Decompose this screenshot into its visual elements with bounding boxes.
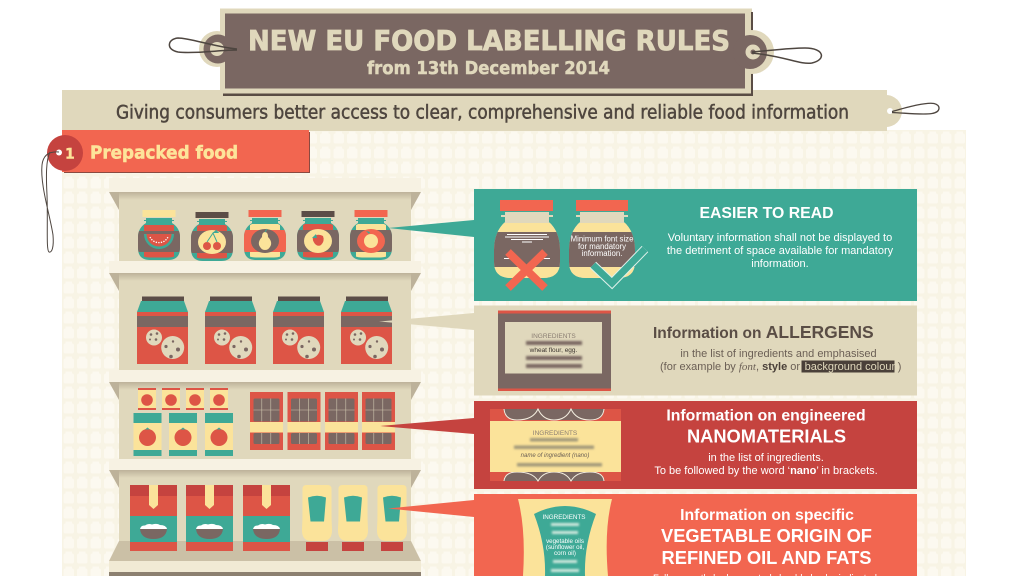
oil bottle label: INGREDIENTS <box>542 514 586 521</box>
example text: (for example by font, style or background colour ) <box>660 361 901 373</box>
right string <box>752 48 821 63</box>
heading: Information on ALLERGENS <box>653 322 874 342</box>
ingredient label with emphasis: INGREDIENTS <box>531 333 576 340</box>
body text: the detriment of space available for mandatory <box>667 245 894 257</box>
title date: from 13th December 2014 <box>367 58 610 79</box>
ingredient label with emphasis <box>498 310 611 391</box>
product: cookie cartons <box>137 296 392 364</box>
ingredient label nano <box>490 409 621 481</box>
heading: Information on engineered <box>666 408 866 424</box>
product: strawberry jam jar <box>297 211 339 260</box>
section number: 1 <box>65 146 75 162</box>
callout pointer: jar <box>388 220 474 237</box>
title text: NEW EU FOOD LABELLING RULES <box>248 24 730 57</box>
tag string <box>42 152 59 252</box>
supermarket shelves <box>109 178 421 576</box>
oil bottle label: (sunflower oil, <box>546 544 584 551</box>
left string <box>169 38 237 53</box>
title tag <box>169 8 821 96</box>
jar with small text and cross <box>494 200 560 288</box>
panel: nanomaterials <box>380 401 917 489</box>
subtitle tag <box>62 90 939 131</box>
section banner: prepacked food <box>42 130 310 252</box>
product: cherry jam jar <box>191 212 233 261</box>
panel: easier to read <box>388 189 917 301</box>
callout pointer: carton <box>379 313 474 330</box>
oil bottle label: vegetable oils <box>546 538 584 545</box>
body text: in the list of ingredients and emphasised <box>680 348 877 360</box>
product: chocolate bars <box>250 392 395 450</box>
body text: To be followed by the word ‘nano’ in brackets. <box>654 465 878 477</box>
ingredient label nano: INGREDIENTS <box>533 430 578 437</box>
heading: Information on specific <box>680 507 854 524</box>
jar label text: for mandatory <box>578 242 626 251</box>
panel: allergens <box>379 306 917 396</box>
patterned background panel <box>62 130 966 576</box>
heading emphasis: REFINED OIL AND FATS <box>662 547 871 568</box>
shelf structure <box>109 178 421 576</box>
product: pear jam jar <box>244 210 286 260</box>
section title: Prepacked food <box>90 142 238 164</box>
body text: in the list of ingredients. <box>708 452 824 464</box>
body text: information. <box>751 258 809 270</box>
heading emphasis: VEGETABLE ORIGIN OF <box>661 525 872 546</box>
product: cereal boxes <box>130 485 290 551</box>
heading: EASIER TO READ <box>699 205 834 222</box>
product: orange jam jar <box>350 210 392 260</box>
subtitle text: Giving consumers better access to clear, comprehensive and reliable food information <box>116 102 849 124</box>
jar label text: Minimum font size <box>571 234 633 244</box>
jar with large text and tick <box>569 200 645 283</box>
jar label text: information. <box>582 249 622 258</box>
product: watermelon jam jar <box>138 210 180 260</box>
heading emphasis: NANOMATERIALS <box>687 426 846 446</box>
oil bottle label: corn oil) <box>554 550 576 557</box>
product: oil bottles <box>302 485 407 551</box>
panel: vegetable oils <box>388 494 917 576</box>
emphasis highlight <box>802 360 894 372</box>
callout pointer: bottle <box>388 500 474 517</box>
callout pointer: chocolate <box>380 418 474 434</box>
body text: Voluntary information shall not be displayed to <box>668 232 892 244</box>
product: small tomato cans <box>138 388 228 410</box>
ingredient label nano: name of ingredient (nano) <box>521 453 589 459</box>
oil bottle label <box>518 499 612 576</box>
product: large tomato tins <box>134 413 233 456</box>
ingredient label with emphasis: wheat flour, egg. <box>529 347 578 354</box>
